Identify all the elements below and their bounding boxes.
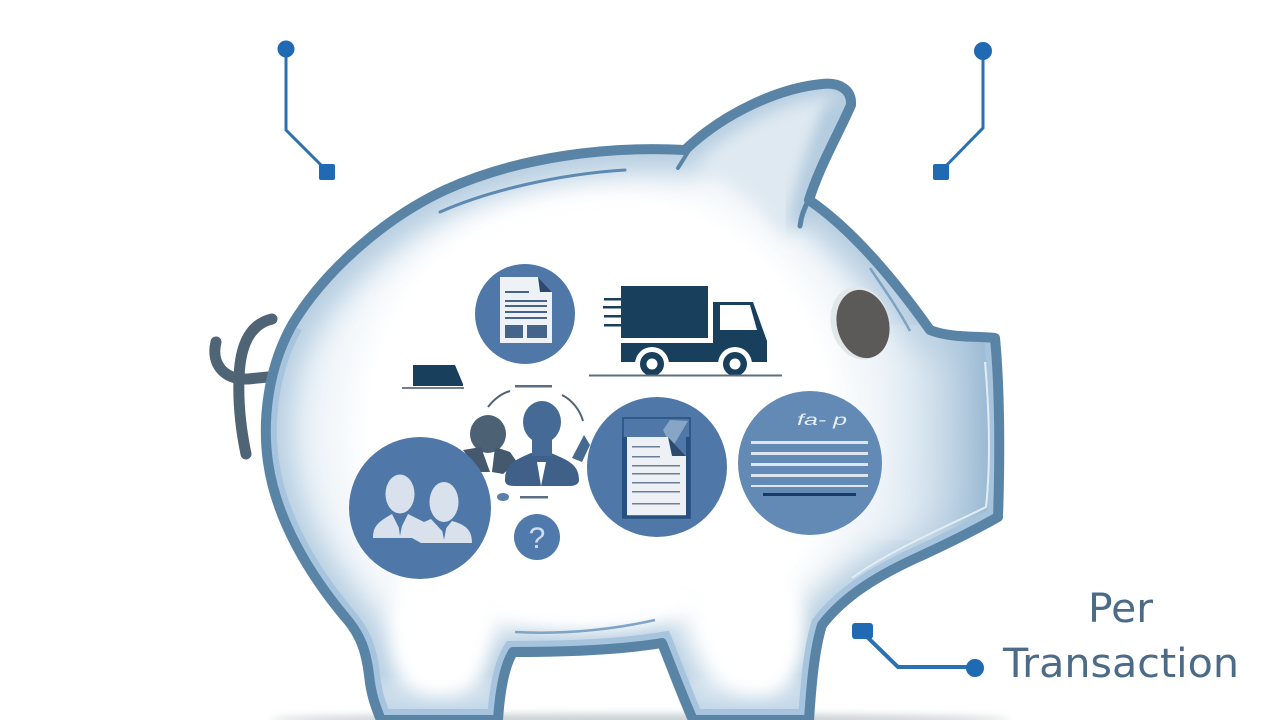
icon: dark people group <box>463 385 590 498</box>
tail <box>215 319 272 454</box>
eye <box>823 280 897 366</box>
connector: bottom right <box>852 623 984 677</box>
ground shadow <box>270 714 1010 720</box>
icon: form lines circle <box>738 391 882 535</box>
icon: two people circle <box>349 437 491 579</box>
piggy bank body <box>266 84 1000 720</box>
icon: question circle: ? <box>529 522 545 555</box>
icon: small truck <box>402 365 464 389</box>
icon: form lines circle: fa- p <box>797 412 847 429</box>
inner rim band <box>266 325 999 720</box>
snout crease <box>870 268 910 331</box>
back highlight <box>440 170 625 212</box>
ear crease <box>800 200 809 226</box>
icon: document circle two <box>587 397 727 537</box>
piggy bank infographic <box>209 40 1236 720</box>
inner glass shading <box>266 84 1000 720</box>
connector: top left <box>278 40 335 180</box>
connector: top right <box>933 42 992 180</box>
label: Per Transaction: Transaction <box>1002 641 1239 687</box>
icon: delivery truck <box>589 286 782 381</box>
small blob <box>497 493 509 501</box>
icon: document circle <box>475 264 575 364</box>
label: Per Transaction: Per <box>1088 586 1154 632</box>
label: Per Transaction <box>1002 586 1239 687</box>
icon: question circle <box>514 514 560 560</box>
